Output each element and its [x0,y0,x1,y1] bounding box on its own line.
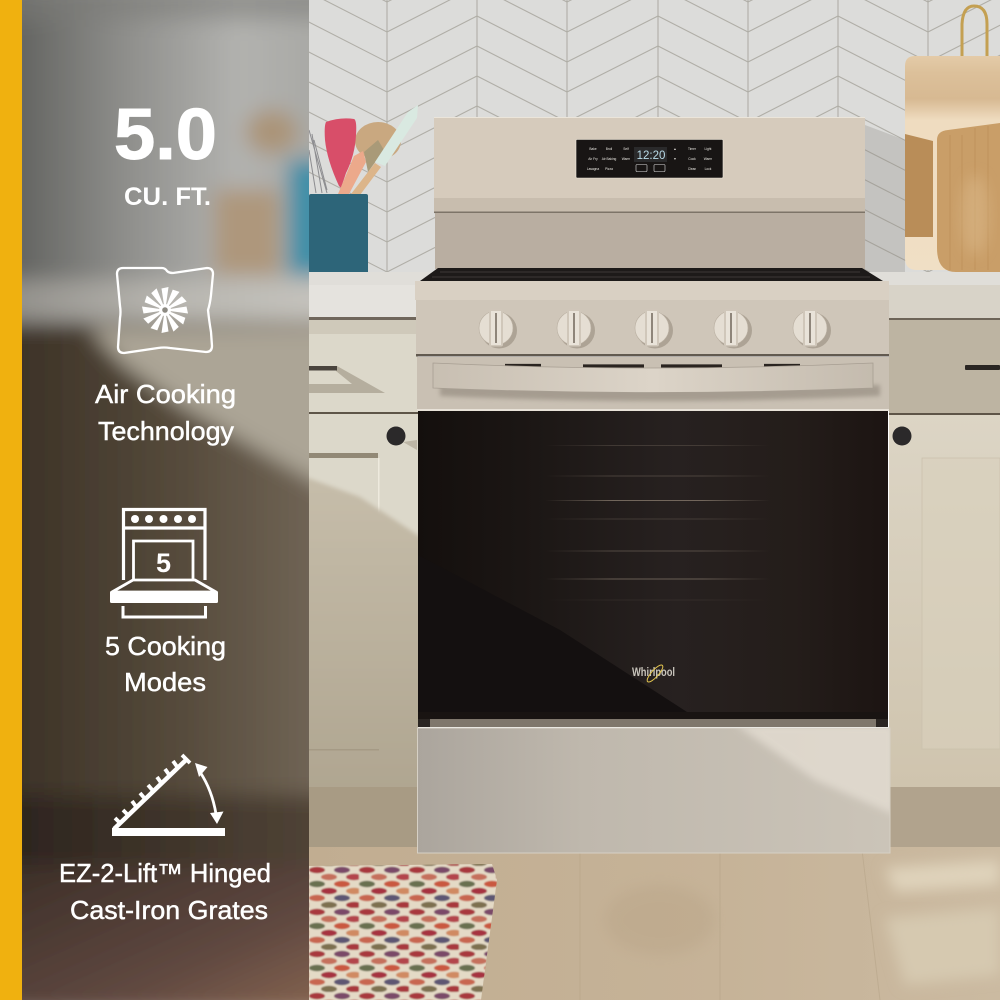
icon: lifting grate with angle arrow [112,755,225,836]
utensil crock [309,105,418,274]
oven window [418,411,888,713]
reflection [418,555,687,712]
wood handle [351,163,381,195]
red spatula [325,118,356,188]
capacity figure: 5.0 [114,95,217,175]
recessed door panel [309,453,378,458]
mint knife [375,105,418,166]
knob 5 [793,310,831,348]
toe kick [309,787,418,848]
black knob [892,426,912,446]
knob 1 [479,310,517,348]
control panel: Clean [688,167,696,171]
cutting boards and hook [905,6,1000,272]
wooden spoon [355,122,401,160]
peach spatula [338,151,366,194]
icon: air cooking fan [117,268,213,353]
knob panel [415,281,889,356]
Whirlpool logo [632,663,675,684]
oven door top with handle [417,357,889,411]
control panel: Warm [704,157,713,161]
sidebar features [59,95,271,925]
control panel: Lock [705,167,712,171]
capacity unit: CU. FT. [124,183,211,211]
door panel [922,458,1000,640]
knob 3 [635,310,673,348]
control panel: Warm [622,157,631,161]
drawer handle and its shadow [309,366,385,393]
control panel: Lasagna [587,167,599,171]
whisk [309,130,327,193]
control panel: Air Baking [602,157,616,161]
patterned rug [305,860,504,1000]
control panel: Pizza [605,167,613,171]
control panel: Cook [688,157,696,161]
frosted sidebar panel [22,0,309,1000]
control panel: Timer [688,147,697,151]
control panel: Bake [589,147,597,151]
brass hook [962,6,987,56]
cooktop grates [420,268,883,281]
control panel: ▲ [673,147,677,151]
brush [364,140,384,172]
teal crock body [309,194,368,274]
large cutting board [905,56,1000,270]
black knob [386,426,406,446]
cooking modes label line 2: Modes [124,667,206,697]
yellow brand bar [0,0,22,1000]
grates label line 2: Cast-Iron Grates [70,895,268,925]
icon: oven with 5 modes [110,510,218,617]
icon: oven with 5 modes: 5 [156,548,171,578]
air cooking label line 1: Air Cooking [95,379,236,409]
control panel: Broil [606,147,612,151]
small cutting board [937,123,1000,272]
air cooking label line 2: Technology [98,416,234,446]
control panel: 12:20 [637,150,665,162]
kitchen scene background [297,0,1000,1000]
control panel: ▼ [673,157,677,161]
backguard [434,117,865,269]
start and cancel buttons [636,164,647,172]
right cabinet [889,320,1000,848]
countertops [309,272,1000,320]
board shadow [905,134,933,237]
storage drawer [418,724,895,853]
oven racks [545,446,770,600]
drawer handle [965,365,1000,370]
control panel: Light [705,147,712,151]
knob 2 [557,310,595,348]
cooking modes label line 1: 5 Cooking [105,631,226,661]
grates label line 1: EZ-2-Lift™ Hinged [59,858,271,888]
control panel: Self [623,147,629,151]
tiled chevron wall [309,0,1000,272]
clock display [634,147,667,162]
wood floor [309,847,1000,1000]
toe kick [889,787,1000,848]
sunlight shadow [309,477,418,787]
control panel: Air Fry [588,157,598,161]
control panel [576,140,723,178]
gas range [415,117,895,853]
hinge strip [418,712,888,727]
knob 4 [714,310,752,348]
left cabinet [309,320,418,847]
Whirlpool logo: Whirlpool [632,667,675,679]
